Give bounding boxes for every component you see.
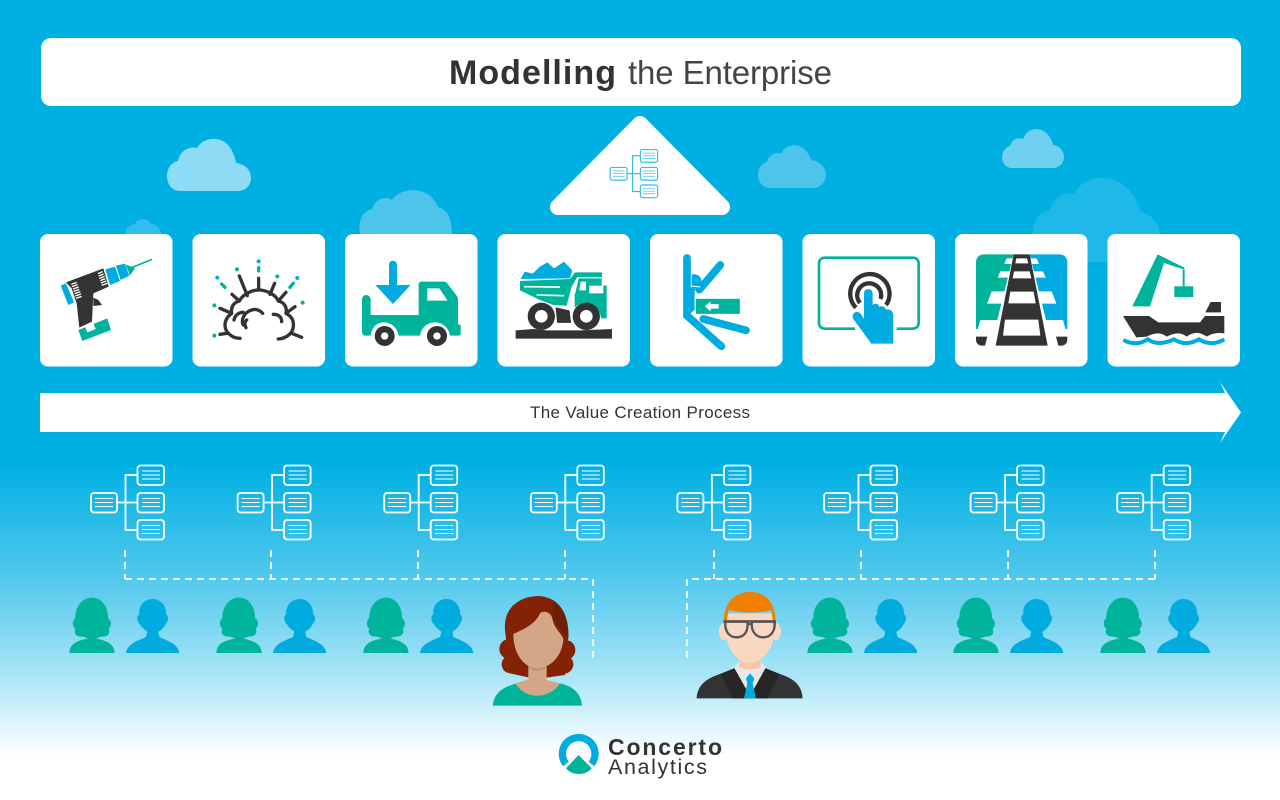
title text: the Enterprise <box>628 54 832 91</box>
dashed connector: left group <box>125 550 593 663</box>
logo mark <box>562 737 595 774</box>
avatar: man <box>697 592 803 698</box>
logo wordmark: Analytics <box>608 755 707 779</box>
cloud: light upper left <box>167 139 251 191</box>
card: drill <box>40 234 172 366</box>
card: ship and crane <box>1108 234 1240 366</box>
model icons row <box>91 466 1190 540</box>
title text: Modelling <box>449 54 616 92</box>
icon: brain <box>212 259 305 339</box>
title text <box>449 54 832 92</box>
cloud: upper right <box>1002 129 1064 168</box>
value creation arrow <box>40 382 1241 443</box>
logo wordmark: Concerto <box>608 734 722 760</box>
logo: Concerto Analytics <box>562 734 722 779</box>
cloud: behind cards left <box>360 190 452 236</box>
dashed connector: right group <box>687 550 1155 663</box>
apex triangle with model icon <box>558 124 722 207</box>
card: railway <box>955 234 1088 366</box>
card: dump truck <box>498 234 630 366</box>
people: right group <box>807 598 1210 653</box>
people: left group <box>69 598 473 653</box>
arrow label: The Value Creation Process <box>530 403 750 422</box>
cloud: centre <box>758 145 826 188</box>
cloud: large right <box>1033 178 1160 262</box>
cloud: far left small <box>125 219 161 236</box>
icon: dump truck <box>516 262 612 339</box>
icon: railway track <box>976 254 1067 346</box>
card: crush hazard <box>650 234 782 366</box>
icon: cargo ship <box>1123 254 1224 343</box>
card: brain <box>192 234 325 366</box>
logo wordmark <box>608 734 722 779</box>
avatar: woman <box>493 596 582 706</box>
icon: touch screen <box>819 258 919 344</box>
icon: person crushed <box>687 258 746 346</box>
title bar <box>41 38 1241 106</box>
icon: truck with arrow <box>362 261 461 346</box>
card: touch screen <box>802 234 935 366</box>
card: delivery truck <box>345 234 478 366</box>
icon: drill <box>61 260 151 341</box>
